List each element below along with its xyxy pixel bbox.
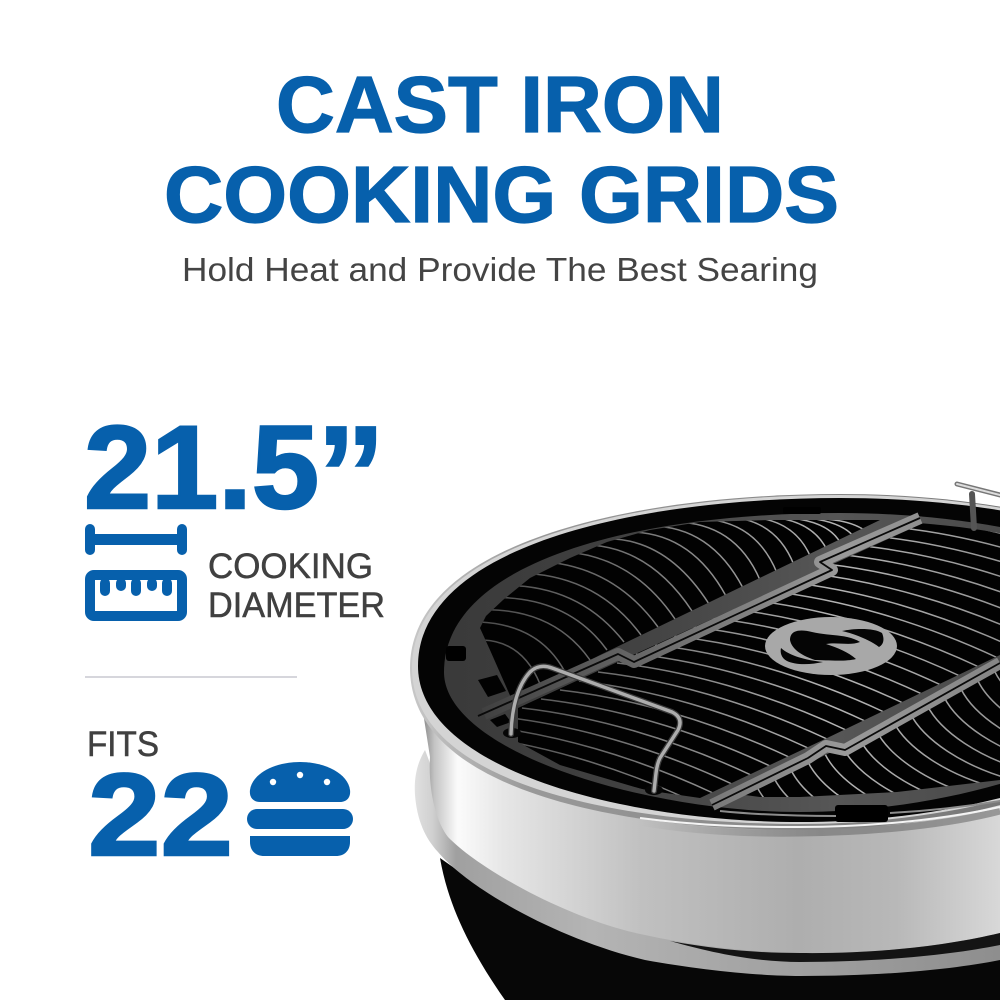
diameter label: DIAMETER — [208, 586, 385, 625]
lower steel ring — [415, 750, 1000, 976]
grill photo — [410, 480, 1000, 1000]
left grate slots — [480, 520, 880, 696]
diameter label: COOKING — [208, 547, 373, 586]
right grate slots — [746, 670, 1000, 797]
rim tabs — [446, 507, 888, 822]
small grate openings — [478, 675, 511, 727]
grill bowl — [440, 858, 1000, 1000]
grate dividers — [478, 518, 1000, 805]
title — [164, 60, 839, 239]
burger count: 22 — [88, 749, 233, 880]
burger capacity stat — [87, 725, 353, 880]
diameter value: 21.5 — [84, 402, 319, 534]
rim flange strips — [720, 801, 1000, 816]
icon: ruler — [90, 575, 182, 616]
middle grate slots — [518, 523, 1000, 798]
rim — [410, 494, 1000, 830]
diameter value — [84, 396, 386, 553]
fits label: FITS — [87, 725, 159, 764]
icon: width bar — [85, 524, 187, 555]
diameter label — [208, 547, 385, 625]
cooking diameter stat — [84, 396, 386, 625]
title: COOKING GRIDS — [164, 150, 839, 239]
diameter value: ” — [316, 396, 386, 553]
cast iron grate — [444, 512, 1000, 812]
icon: burger — [247, 762, 353, 856]
subtitle: Hold Heat and Provide The Best Searing — [182, 251, 818, 288]
grate logo — [765, 617, 897, 675]
steel band — [423, 712, 1000, 953]
title: CAST IRON — [276, 60, 724, 149]
front handle — [503, 666, 680, 795]
rear handle — [957, 484, 1000, 528]
